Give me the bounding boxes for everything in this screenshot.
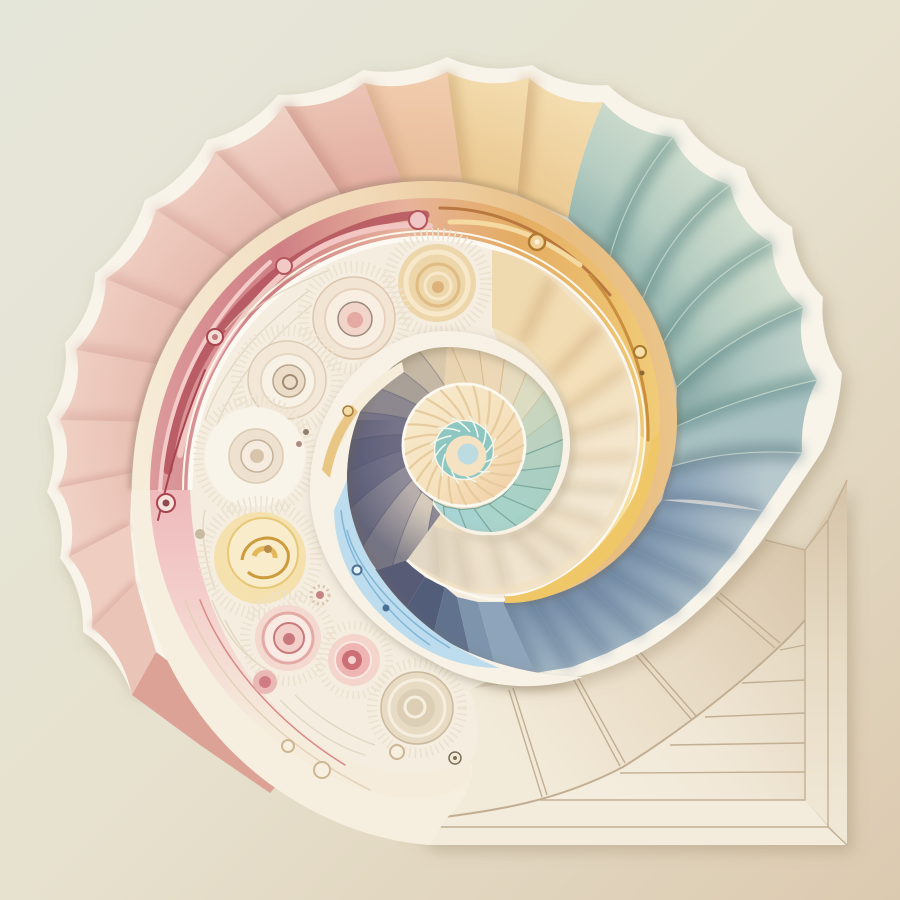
swirl: cream one	[237, 330, 337, 430]
white scalloped rim	[47, 57, 842, 695]
frame: bottom strips	[400, 800, 847, 845]
ruled triangle steps	[540, 620, 805, 800]
swirl: pink small	[319, 625, 389, 695]
band soft shadow	[132, 181, 677, 602]
main chamber	[190, 238, 638, 772]
pale blue ribbon	[334, 480, 500, 668]
swirl: taupe	[372, 663, 462, 753]
upper right yellow steps	[407, 250, 638, 594]
teal whorl ray lines	[430, 416, 498, 484]
chamber swirls	[195, 234, 486, 764]
swirl: cream two	[198, 400, 312, 514]
dark pink last step	[132, 652, 300, 793]
frame: outer strips	[805, 480, 847, 845]
centre cream	[446, 436, 486, 476]
swirl: yellow	[204, 502, 316, 614]
lower cream part of band rim	[132, 490, 472, 845]
chamber white edge	[190, 238, 638, 594]
main spiral band: outer rim	[132, 181, 677, 845]
step highlight lines	[610, 137, 817, 467]
frame lines	[390, 480, 847, 845]
teal whorl	[434, 420, 494, 480]
inner steps: purple and tan fan	[347, 347, 447, 570]
nautilus ray lines	[404, 385, 524, 505]
white line under bottom steps	[407, 560, 510, 600]
ribbon small rosettes	[157, 211, 646, 778]
lower pale pink ribbon	[150, 490, 472, 799]
swirl: tan top	[388, 234, 486, 332]
outer stair steps: yellow and peach section	[364, 72, 603, 218]
chamber edge lines	[183, 231, 645, 600]
centre pale blue core	[458, 444, 478, 464]
lower dark blue steps	[372, 560, 535, 675]
swirl: tiny pink	[253, 670, 277, 694]
outer stair steps: pink section	[58, 83, 817, 793]
second spiral cream rim	[310, 331, 583, 686]
yellow ribbon tail	[505, 430, 660, 603]
swirl: pink cream	[303, 267, 405, 369]
swirl: pink large	[245, 595, 331, 681]
outer stair steps: green section	[568, 102, 817, 467]
main spiral band: pink to gold ribbon	[150, 198, 660, 799]
ornaments at the curl end	[195, 429, 461, 764]
inner steps: green fan	[433, 347, 563, 532]
chamber flowing paper lines	[203, 262, 375, 755]
rim cap and gold ornament	[322, 362, 404, 478]
ribbon dark red ornament strokes	[158, 208, 648, 790]
square frame and floor	[390, 480, 847, 845]
inner nautilus circle	[402, 382, 526, 508]
outer stair steps: blue section	[478, 452, 802, 675]
